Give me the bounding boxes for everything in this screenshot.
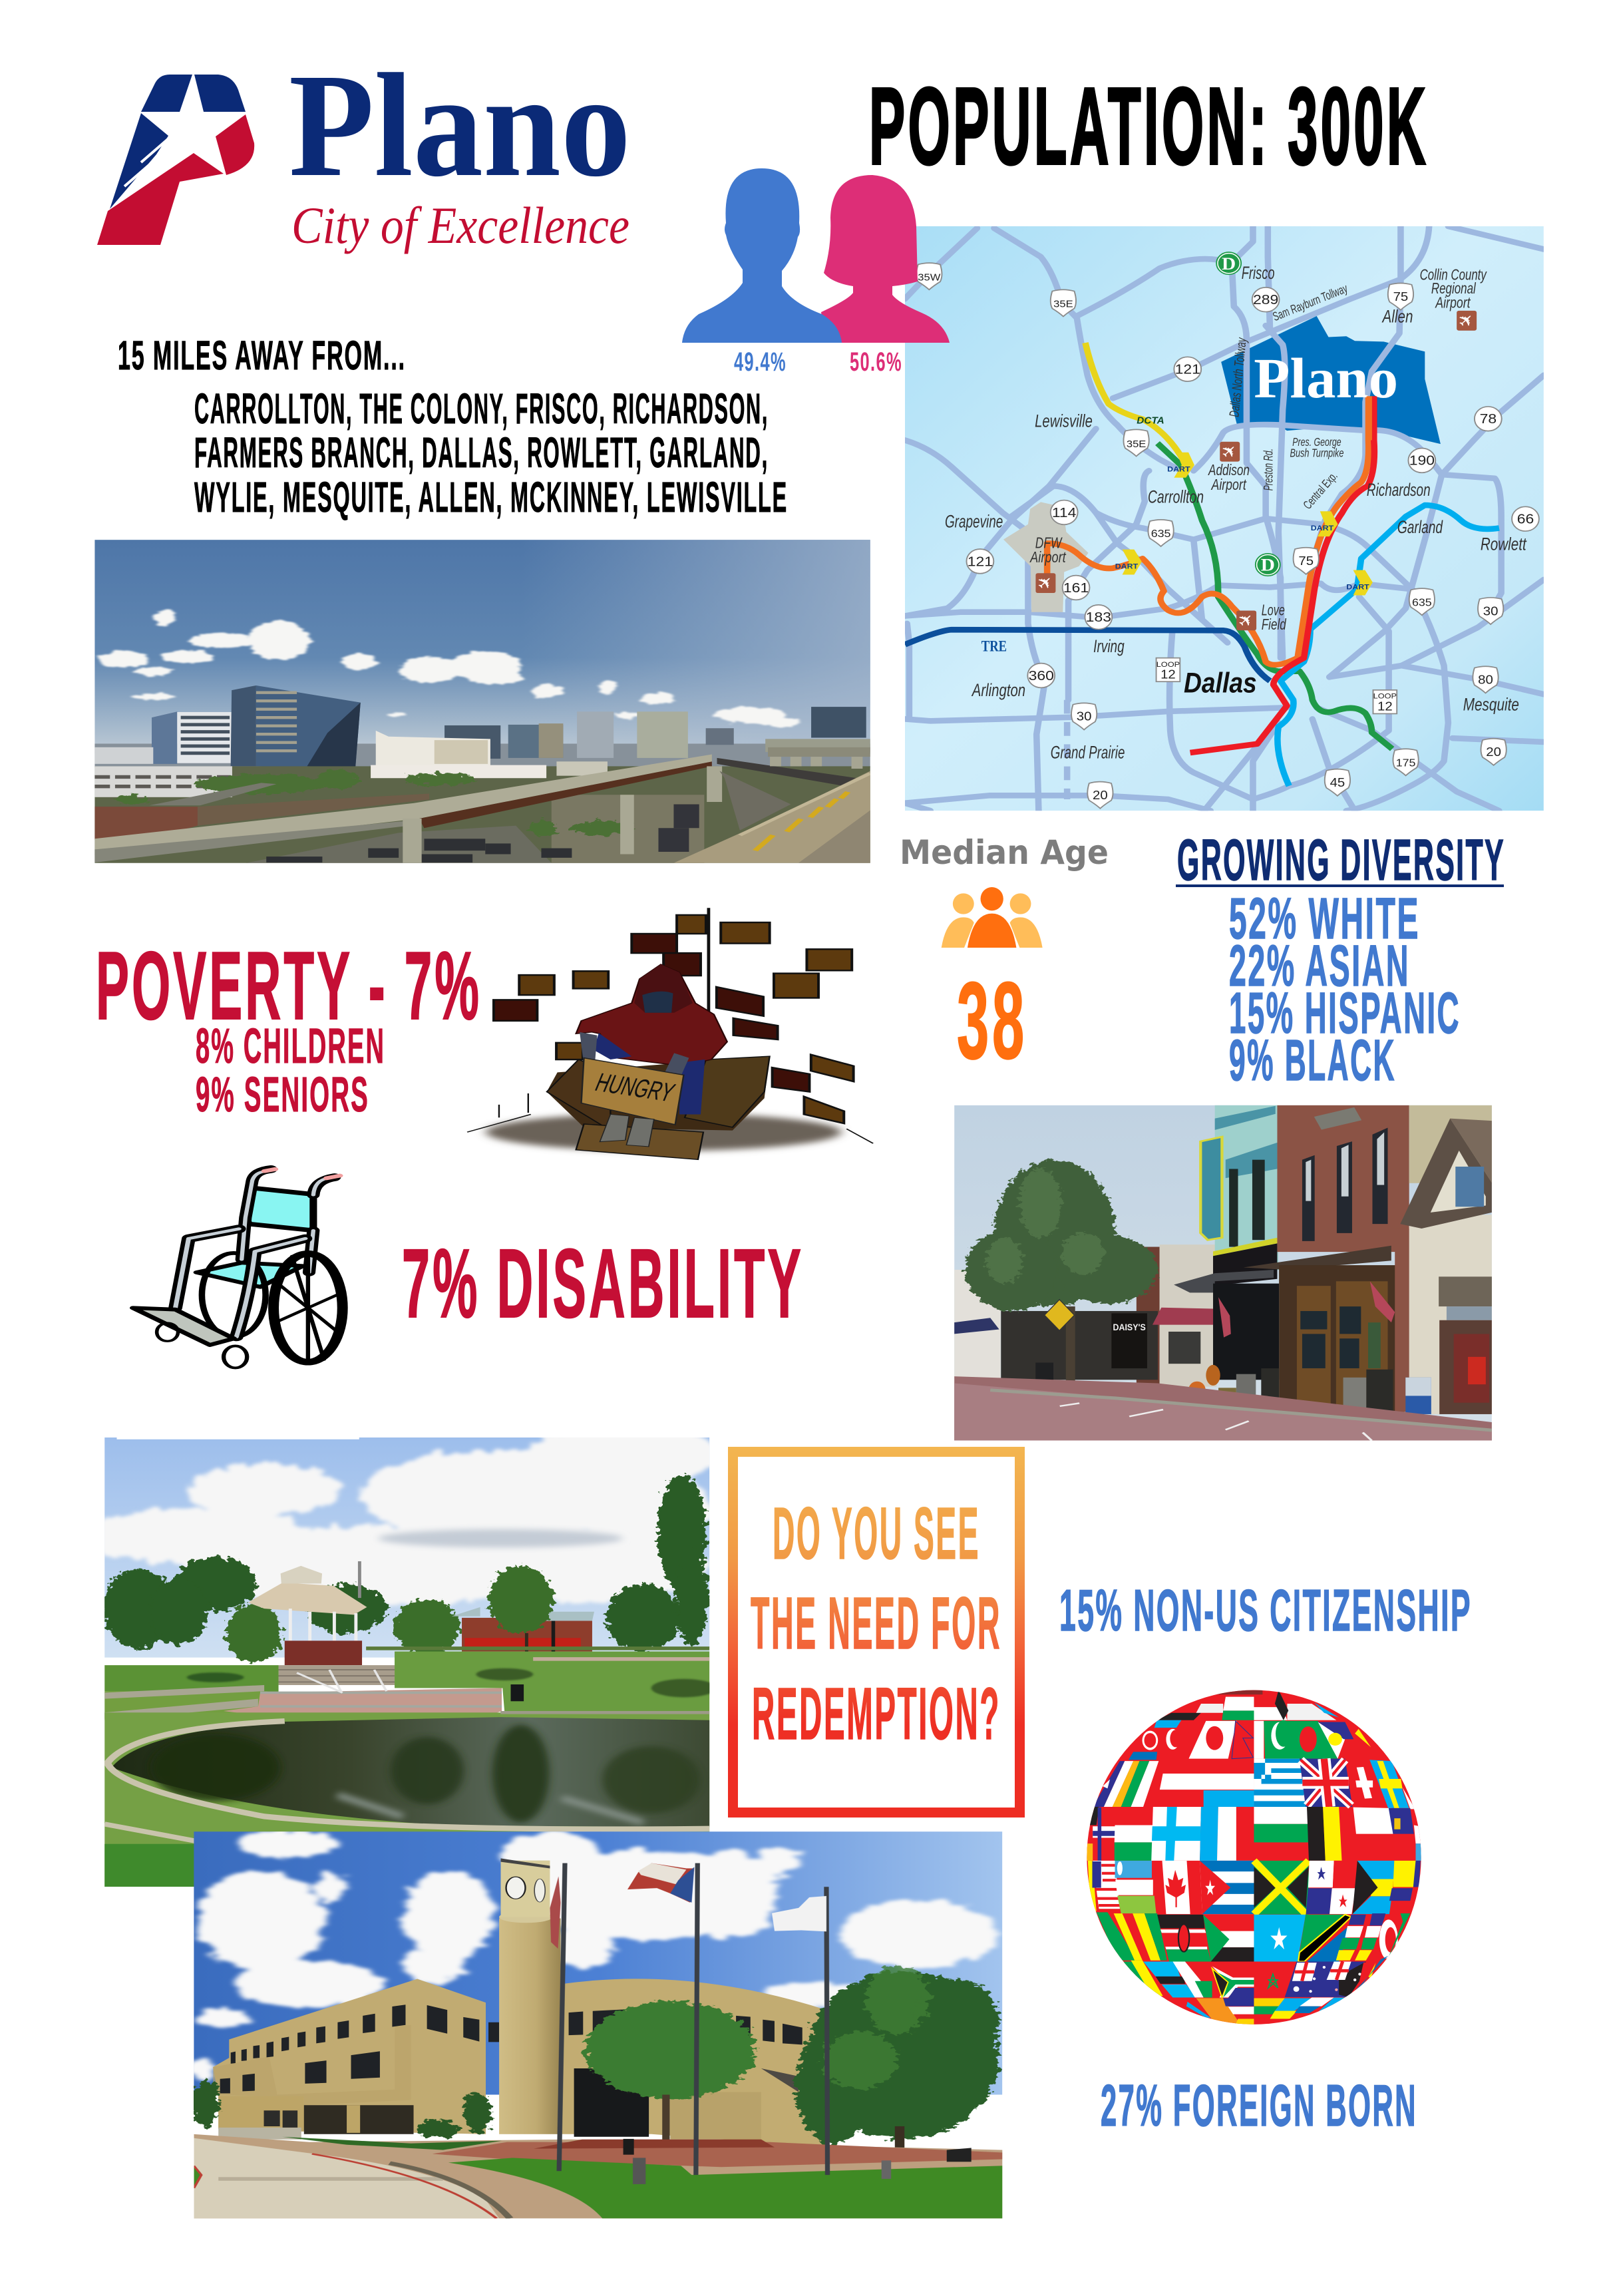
- stat: disability: 7% DISABILITY: [402, 1229, 804, 1338]
- DART and DCTA station markers: DART: [1346, 584, 1369, 591]
- bottom row: [1164, 1998, 1349, 2024]
- city labels: Dallas: [1184, 666, 1257, 699]
- shops behind tree: [954, 1270, 1001, 1384]
- photo: park gazebo and pond: [81, 1426, 721, 1887]
- city labels: Grapevine: [945, 512, 1003, 531]
- transit lines: [905, 343, 1499, 786]
- city labels: Lewisville: [1035, 411, 1093, 431]
- highway shields: 183: [1086, 609, 1111, 625]
- highway shields: [916, 263, 1539, 809]
- photo: downtown Plano street: DAISY'S: [1113, 1322, 1146, 1332]
- city labels: Frisco: [1242, 264, 1275, 283]
- highway shields: 12: [1160, 668, 1176, 681]
- bricks: [494, 915, 854, 1123]
- photo: Plano city hall with flags: [189, 1829, 1002, 2218]
- city labels: Airport: [1210, 477, 1247, 494]
- city labels: Airport: [1029, 549, 1067, 566]
- city labels: Collin County: [1420, 266, 1487, 284]
- parking lot: [246, 826, 552, 863]
- hooded figure: [576, 964, 727, 1066]
- stat: median age 38: 38: [957, 960, 1027, 1081]
- tree: [966, 1160, 1158, 1311]
- trees background: [103, 1474, 708, 1662]
- highway shields: 114: [1052, 504, 1076, 520]
- highway shields: 635: [1151, 528, 1170, 540]
- highway shields: 190: [1409, 453, 1435, 468]
- pond water: [112, 1717, 709, 1827]
- brick building: [1277, 1105, 1409, 1252]
- gazebo: [248, 1583, 367, 1615]
- highway shields: 45: [1330, 776, 1345, 790]
- city labels: [945, 264, 1527, 762]
- male percentage: 49.4%: [734, 347, 787, 377]
- office buildings: [94, 685, 870, 767]
- lower highway and overpass: [719, 771, 791, 831]
- lawn: [104, 1665, 279, 1697]
- sidewalk and street: [954, 1376, 1492, 1441]
- city labels: Grand Prairie: [1051, 743, 1125, 762]
- foreground trees over depot: [488, 1566, 554, 1633]
- city labels: Garland: [1397, 517, 1443, 537]
- stat: poverty: 9% SENIORS: [196, 1067, 369, 1122]
- list: diversity statistics: 22% ASIAN: [1229, 934, 1410, 998]
- Plano city area: [1221, 316, 1441, 444]
- highway shields: 30: [1077, 710, 1092, 723]
- city labels: Love: [1262, 602, 1285, 619]
- trees: [190, 1966, 999, 2145]
- row: Kenya Sudan Somalia Tanzania Tunisia: [1097, 1912, 1410, 1961]
- city labels: Bush Turnpike: [1290, 447, 1343, 459]
- highway shields: 35E: [1127, 439, 1146, 450]
- text: list of nearby cities: FARMERS BRANCH, DALLAS, ROWLETT, GARLAND,: [194, 429, 769, 477]
- city labels: Field: [1262, 616, 1287, 634]
- row: Japan Nepal Pakistan Bangladesh Philippines: [1129, 1720, 1371, 1760]
- airport icons: ✈: [1032, 571, 1059, 595]
- airport icons: ✈: [1233, 609, 1260, 632]
- white strip at top: [117, 1437, 359, 1439]
- clouds: [98, 610, 801, 727]
- city labels: Central Exp.: [1300, 470, 1340, 511]
- female percentage: 50.6%: [850, 347, 902, 377]
- tagline: City of Excellence: City of Excellence: [291, 196, 629, 254]
- city labels: Pres. George: [1292, 435, 1341, 449]
- callout: do you see the need for redemption: [728, 1447, 1025, 1818]
- highway shields: 35E: [1053, 299, 1073, 309]
- icon: globe of world flags: [1085, 1690, 1423, 2024]
- highway shields: 20: [1486, 745, 1501, 759]
- airport icons: ✈: [1453, 309, 1480, 333]
- highway shields: 75: [1298, 554, 1314, 568]
- foreground barrier wall: [673, 771, 870, 863]
- city labels: Addison: [1208, 462, 1250, 479]
- city labels: Richardson: [1367, 480, 1431, 500]
- stat: poverty: 8% CHILDREN: [196, 1018, 385, 1073]
- text: list of nearby cities: WYLIE, MESQUITE, ALLEN, MCKINNEY, LEWISVILLE: [194, 473, 788, 521]
- highway shields: 30: [1483, 604, 1499, 618]
- photo: Plano skyline and highway: [94, 540, 870, 864]
- highway shields: 78: [1480, 411, 1497, 427]
- ground and trees: [94, 766, 870, 864]
- highway shields: 80: [1478, 673, 1493, 687]
- flagpoles and flags: [559, 1863, 828, 2175]
- grass: [448, 2158, 1002, 2218]
- icon: male silhouette: [682, 168, 842, 343]
- city labels: Preston Rd.: [1262, 449, 1276, 490]
- lower lawn: [104, 1712, 709, 1887]
- infographic canvas: THE NEED FOR: [751, 1583, 1001, 1664]
- vertical sign: [1200, 1137, 1222, 1240]
- airport icons: ✈: [1216, 440, 1243, 464]
- highway shields: 12: [1377, 699, 1393, 713]
- DART D markers: D: [1222, 254, 1236, 274]
- red train and depot: [462, 1618, 592, 1651]
- city labels: Airport: [1435, 294, 1471, 311]
- DART and DCTA station markers: DART: [1167, 466, 1190, 473]
- icon: star P logo mark: [97, 75, 254, 245]
- clock tower: [499, 1858, 561, 2134]
- awning and lower storefront: [1174, 1270, 1274, 1292]
- highway shields: 161: [1063, 580, 1089, 596]
- highway shields: LOOP: [1373, 691, 1397, 700]
- tudor building: [1409, 1105, 1492, 1183]
- list: diversity statistics: 9% BLACK: [1229, 1028, 1396, 1093]
- icon: wheelchair: [133, 1169, 344, 1368]
- highway shields: 20: [1093, 789, 1108, 803]
- highway shields: LOOP: [1156, 660, 1180, 669]
- icon: three people: [942, 887, 1043, 948]
- city labels: Carrollton: [1148, 487, 1204, 506]
- plaza, steps and lawn: [194, 2134, 1002, 2218]
- DART D markers: [1216, 252, 1280, 576]
- highway shields: 635: [1412, 596, 1432, 608]
- city labels: Rowlett: [1481, 534, 1527, 554]
- DFW airport zone: [1003, 502, 1089, 612]
- clouds: [81, 1426, 721, 1606]
- cardboard boxes: [547, 1056, 770, 1131]
- highway shields: 360: [1029, 668, 1054, 683]
- clouds: [189, 1829, 999, 2079]
- hands: [580, 1032, 689, 1085]
- airport icons: [1032, 309, 1480, 632]
- city labels: Arlington: [971, 680, 1025, 700]
- row: Norway Hungary Finland Italy Oman Belgium Liechtenstein: [1087, 1807, 1421, 1862]
- theater building: [1215, 1105, 1278, 1270]
- illustration: homeless person with sign: HUNGRY: [591, 1068, 679, 1107]
- highway shields: 66: [1517, 511, 1534, 526]
- infographic canvas: REDEMPTION?: [752, 1673, 1001, 1755]
- row: Ireland Austria Greece UK Switzerland Sweden: [1093, 1759, 1415, 1809]
- elevated highway: [419, 761, 712, 828]
- stat: poverty: POVERTY - 7%: [96, 932, 482, 1040]
- illustration: homeless person with sign: [467, 908, 873, 1159]
- stat: poverty: [96, 932, 482, 1122]
- bench and lights: [947, 2148, 972, 2162]
- city labels: Sam Rayburn Tollway: [1270, 282, 1351, 324]
- DART and DCTA station markers: TRE: [981, 638, 1007, 655]
- city labels: Dallas North Tollway: [1227, 337, 1250, 417]
- logo: Plano City of Excellence: [97, 43, 631, 254]
- cardboard sign: [582, 1058, 683, 1125]
- text: 15 miles away from: 15 MILES AWAY FROM...: [118, 333, 406, 378]
- highway shields: 121: [1175, 361, 1200, 377]
- panel: map of Dallas area: [905, 226, 1544, 811]
- DART and DCTA station markers: DART: [1311, 524, 1333, 532]
- callout: do you see the need for redemption: DO YOU SEE: [773, 1493, 980, 1575]
- list: diversity statistics: [1229, 886, 1461, 1093]
- wordmark: Plano: Plano: [289, 43, 631, 208]
- left wing of building: [213, 1979, 499, 2140]
- flags: [1218, 1297, 1231, 1338]
- DART and DCTA station markers: DCTA: [1137, 415, 1164, 427]
- city labels: Irving: [1093, 636, 1125, 656]
- DART and DCTA station markers: DART: [1115, 563, 1138, 570]
- pedestrian crossing sign: [1045, 1300, 1075, 1330]
- row: South Africa Morocco New Zealand Australia: [1123, 1956, 1388, 1999]
- curving road: [194, 2138, 499, 2218]
- DART and DCTA station markers: [981, 415, 1373, 655]
- highway shields: 75: [1393, 290, 1408, 304]
- terrace with railing: [224, 1688, 502, 1718]
- photo: downtown Plano street: [954, 1105, 1492, 1441]
- top rows: [1154, 1690, 1339, 1728]
- road network: [905, 226, 1544, 811]
- icon: female silhouette: [821, 175, 950, 343]
- city labels: Allen: [1381, 307, 1413, 326]
- text: list of nearby cities: [194, 385, 788, 521]
- infographic canvas: CARROLLTON, THE COLONY, FRISCO, RICHARDSON,: [194, 385, 769, 433]
- text: median age: Median Age: [900, 833, 1109, 872]
- shoes: [600, 1114, 654, 1147]
- city labels: Mesquite: [1463, 695, 1519, 714]
- tilted roof structure: [149, 783, 277, 805]
- DART D markers: D: [1261, 556, 1275, 575]
- highway shields: 121: [968, 553, 993, 569]
- highway shields: 175: [1396, 757, 1415, 769]
- planters and pumpkins: [1188, 1322, 1431, 1414]
- city labels: Regional: [1431, 280, 1476, 297]
- round wing of building: [561, 1979, 828, 2148]
- highway shields: 289: [1253, 291, 1278, 307]
- city labels: DFW: [1035, 534, 1063, 552]
- list: diversity statistics: 52% WHITE: [1229, 886, 1420, 951]
- row: USA Uzbekistan Canada Jordan Jamaica Panama Bahamas: [1088, 1861, 1421, 1915]
- city labels: Plano: [1254, 347, 1398, 410]
- highway shields: 35W: [918, 272, 941, 283]
